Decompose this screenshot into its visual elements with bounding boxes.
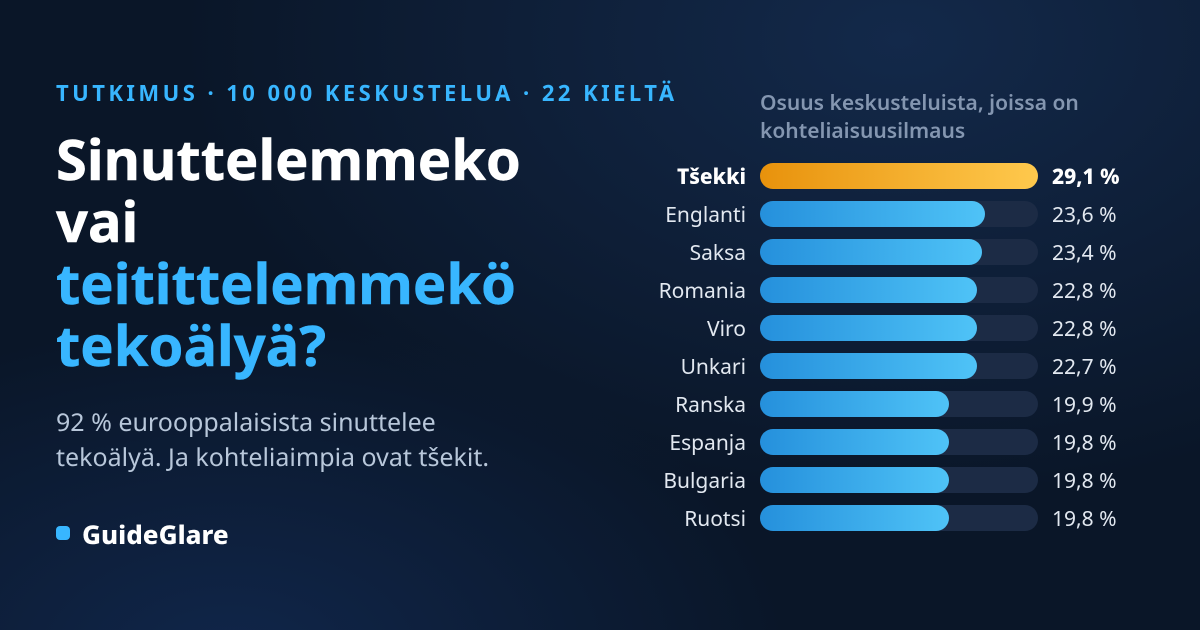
brand name: GuideGlare xyxy=(82,516,229,552)
subtitle text xyxy=(56,405,489,474)
chart heading: Osuus keskusteluista, joissa on xyxy=(760,89,1079,117)
icon: brand square xyxy=(56,526,70,540)
bar: Viro: Viro xyxy=(707,315,746,343)
bar: Tšekki xyxy=(677,163,1119,191)
bar: Espanja: 19,8 % xyxy=(1052,429,1117,457)
bar: Viro xyxy=(707,315,1117,343)
bar: Espanja: Espanja xyxy=(669,429,746,457)
bar: Tšekki: 29,1 % xyxy=(1052,163,1119,191)
bar: Bulgaria: Bulgaria xyxy=(663,467,746,495)
bar: Saksa: 23,4 % xyxy=(1052,239,1117,267)
subtitle text: tekoälyä. Ja kohteliaimpia ovat tšekit. xyxy=(56,440,489,474)
bar: Espanja xyxy=(669,429,1117,457)
bar: Viro: 22,8 % xyxy=(1052,315,1117,343)
bar: Unkari xyxy=(681,353,1117,381)
bar: Ranska xyxy=(675,391,1117,419)
bar: Saksa: Saksa xyxy=(690,239,746,267)
bar: Romania: Romania xyxy=(659,277,746,305)
bar: Saksa xyxy=(690,239,1117,267)
bar: Ruotsi: Ruotsi xyxy=(684,505,746,533)
bar: Ranska: Ranska xyxy=(675,391,746,419)
bar: Ruotsi: 19,8 % xyxy=(1052,505,1117,533)
chart heading: kohteliaisuusilmaus xyxy=(760,117,965,145)
bar: Bulgaria xyxy=(663,467,1117,495)
title: vai xyxy=(56,183,138,259)
bar: Englanti xyxy=(665,201,1117,229)
bar: Ranska: 19,9 % xyxy=(1052,391,1117,419)
bar: Unkari: 22,7 % xyxy=(1052,353,1117,381)
title: teitittelemmekö xyxy=(56,245,516,321)
eyebrow: study details: TUTKIMUS · 10 000 KESKUSTELUA · 22 KIELTÄ xyxy=(56,78,678,108)
title: Sinuttelemmeko xyxy=(56,121,521,197)
chart heading xyxy=(760,89,1079,145)
bar: Englanti: 23,6 % xyxy=(1052,201,1117,229)
subtitle text: 92 % eurooppalaisista sinuttelee xyxy=(56,405,436,439)
bar: Englanti: Englanti xyxy=(665,201,746,229)
bar: Romania xyxy=(659,277,1117,305)
bar: Ruotsi xyxy=(684,505,1117,533)
bar: Bulgaria: 19,8 % xyxy=(1052,467,1117,495)
title xyxy=(56,121,521,383)
bar: Tšekki: Tšekki xyxy=(677,163,746,191)
title: tekoälyä? xyxy=(56,307,326,383)
brand: GuideGlare xyxy=(56,516,229,552)
bar: Unkari: Unkari xyxy=(681,353,746,381)
bar: Romania: 22,8 % xyxy=(1052,277,1117,305)
